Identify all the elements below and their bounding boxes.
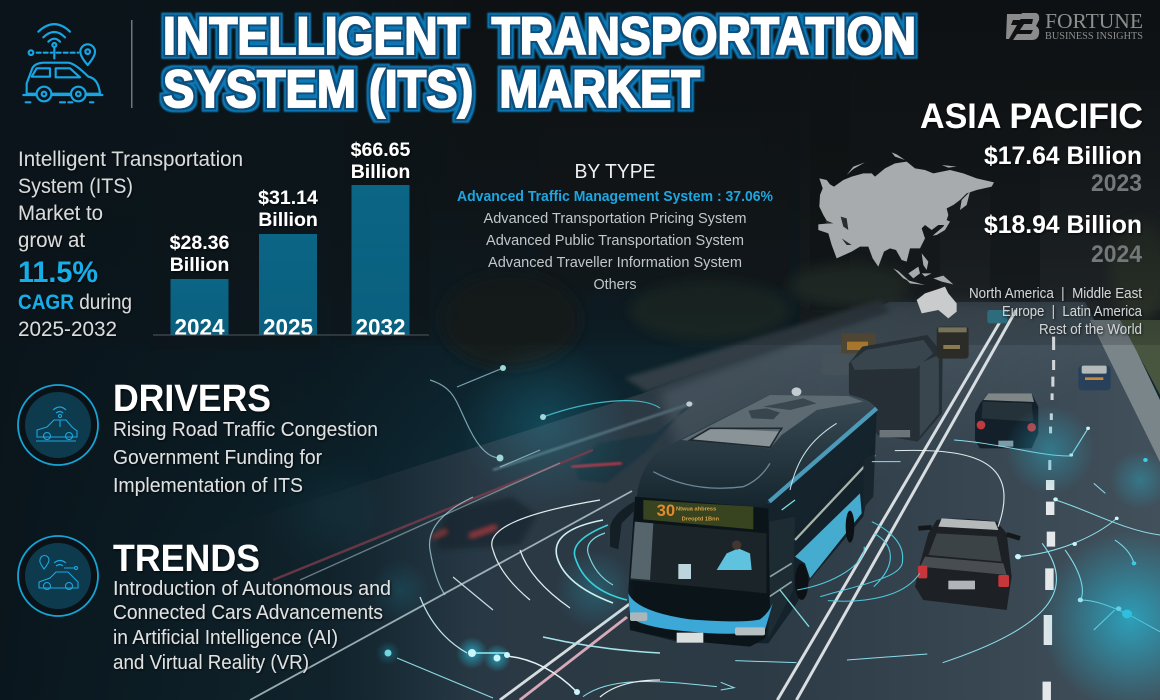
text block: market growth: grow at [18,229,85,252]
sidewalk [625,300,890,392]
destination sign: 30 [657,501,675,520]
blurred car lower [432,497,537,550]
panel: trends: and Virtual Reality (VR) [113,652,309,674]
windshield [630,522,767,593]
glow nodes [686,387,1148,618]
panel: drivers: Rising Road Traffic Congestion [113,419,378,441]
text block: market growth: 11.5% [18,256,98,289]
door panel [768,517,795,638]
black car [975,393,1038,448]
side [773,410,875,530]
panel: drivers: Implementation of ITS [113,475,303,497]
text block: other regions: Europe | Latin America [1002,304,1143,320]
panel: Asia Pacific values: 2023 [1091,170,1142,197]
grey car [915,518,1020,610]
destination sign: Dreoptd 1Bnn [682,517,720,523]
icon: trends badge [18,536,98,616]
trees [440,220,1160,368]
panel: by type: Advanced Transportation Pricing System [484,211,746,227]
glowing sensor arcs [583,387,1160,697]
panel: trends: Introduction of Autonomous and [113,578,391,600]
icon: connected car [23,24,102,102]
main bus [610,393,877,647]
panel: by type: Others [594,277,636,293]
bar 2025: 2025 [263,314,313,340]
bar 2032 [351,139,410,340]
panel: Asia Pacific values: $18.94 Billion [984,211,1142,239]
bar 2025 [258,187,318,340]
mirror [610,502,635,549]
bumper [628,593,773,634]
far car [1078,366,1111,390]
text block: other regions: Rest of the World [1039,322,1142,338]
buildings skyline [801,194,1160,320]
bar 2024: 2024 [174,314,225,340]
destination sign: Ntwua ahbress [676,507,716,513]
title: INTELLIGENT TRANSPORTATION [163,7,916,66]
text block: market growth: 2025-2032 [18,318,117,341]
panel: trends: in Artificial Intelligence (AI) [113,627,338,649]
panel: Asia Pacific values: ASIA PACIFIC [920,97,1143,136]
panel: by type: Advanced Traffic Management System : 37.06% [457,189,773,205]
bar 2025: Billion [258,209,318,231]
front [628,497,770,647]
text block: other regions: North America | Middle East [969,286,1142,302]
bar 2024: Billion [170,254,229,276]
logo: Fortune Business Insights: FORTUNE [1045,9,1143,33]
road markings [500,310,1054,700]
left road streaks and arcs [250,368,660,700]
bar 2032: 2032 [356,314,406,340]
panel: trends: Connected Cars Advancements [113,602,383,624]
text block: market growth: Intelligent Transportation [18,148,243,171]
bar 2024 [170,232,229,340]
panel: by type: Advanced Traveller Information System [488,255,742,271]
text block: market growth [18,148,243,341]
panel: drivers [113,378,378,497]
bar 2032: $66.65 [351,139,410,161]
text block: market growth: CAGR during [18,291,132,314]
blurred car upper [493,403,694,483]
dark van [937,327,969,359]
panel: by type [457,161,773,293]
panel: by type: BY TYPE [574,161,656,183]
panel: Asia Pacific values [920,97,1143,268]
panel: Asia Pacific values: 2024 [1091,241,1143,268]
panel: Asia Pacific values: $17.64 Billion [984,142,1142,170]
glows [1040,530,1160,700]
logo: Fortune Business Insights: BUSINESS INSIGHTS [1045,31,1143,42]
title [163,7,916,119]
bar 2032: Billion [351,161,410,183]
bar 2025: $31.14 [258,187,318,209]
left glowing nodes [384,365,580,695]
panel: trends: TRENDS [113,538,260,580]
roof [637,393,877,507]
title: SYSTEM (ITS) MARKET [163,60,700,119]
destination sign [643,500,753,529]
text block: market growth: Market to [18,202,103,225]
panel: drivers: DRIVERS [113,378,271,420]
text block: other regions [969,286,1143,338]
divider [131,20,132,108]
teal car [987,310,1007,323]
road surface [357,302,1160,700]
panel: trends [113,538,391,674]
panel: by type: Advanced Public Transportation System [486,233,744,249]
icon: drivers badge [18,385,98,465]
bar chart: market size [153,139,429,340]
second bus [849,335,943,442]
panel: drivers: Government Funding for [113,447,322,469]
background: road photo scene [66,181,1160,700]
map: Asia Pacific [818,152,994,318]
scene layer: road and traffic behind the bus [493,310,1054,700]
text block: market growth: System (ITS) [18,175,133,198]
scene layer: cars right lane [937,310,1111,448]
logo: Fortune Business Insights [1006,9,1143,42]
far vehicles [841,333,876,354]
bar 2024: $28.36 [170,232,229,254]
